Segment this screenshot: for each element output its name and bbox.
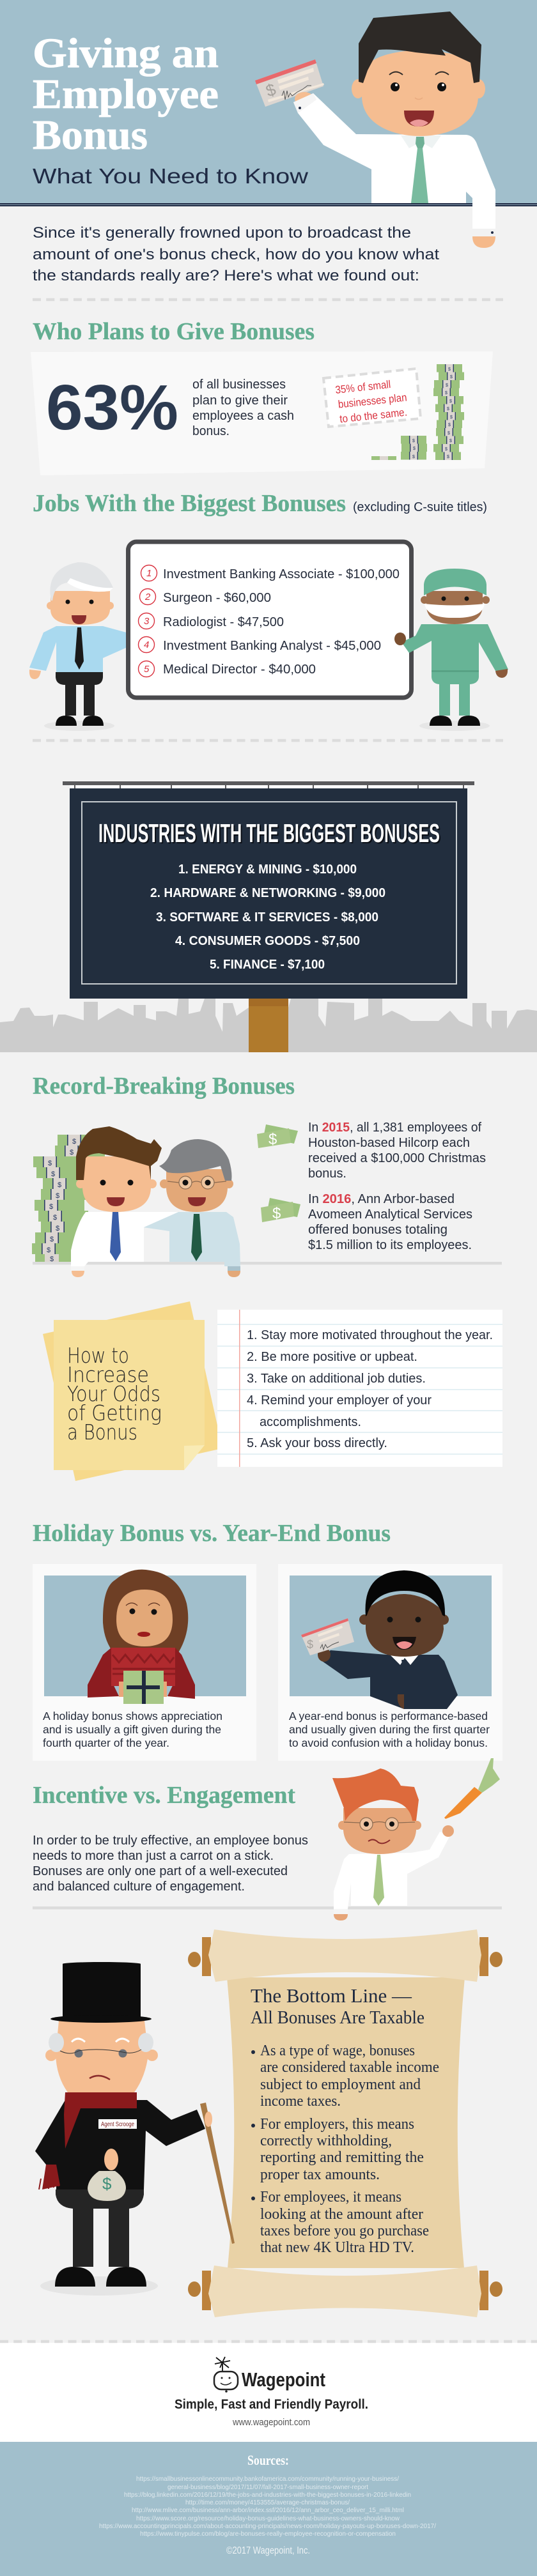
money stacks chart: $ [446, 383, 448, 388]
source links: https://www.score.org/resource/holiday-bonus-guidelines-what-business-owners-should-know [136, 2515, 400, 2522]
text: incentive paragraph: In order to be truly effective, an employee bonus [33, 1834, 308, 1848]
icon: cash bills 2016 [261, 1198, 300, 1222]
panel: lined paper tips [217, 1310, 502, 1467]
text: 2015 record continued [308, 1136, 486, 1181]
bottom roll [188, 2266, 502, 2317]
money stack behind men: $ [48, 1160, 52, 1167]
source links: https://www.accountingprincipals.com/about-accounting-principals/news-room/holiday-payouts-up-bonuses-down-2017/ [99, 2522, 436, 2530]
callout: small businesses: businesses plan [338, 391, 407, 411]
job list: Surgeon - $60,000 [163, 591, 271, 605]
legs and shoes [55, 2189, 146, 2287]
money stacks chart: $ [445, 391, 447, 395]
coat [35, 2100, 205, 2189]
title: Employee [33, 71, 219, 118]
tips list: 4. Remind your employer of your [247, 1393, 432, 1407]
tips list: 3. Take on additional job duties. [247, 1372, 426, 1386]
older man [143, 1139, 240, 1277]
panel: year-end bonus card [278, 1564, 502, 1761]
bonus check: $ [263, 79, 279, 100]
intro paragraph: the standards really are? Here's what we found out: [33, 267, 419, 284]
icon: cash bills 2015: $ [268, 1131, 277, 1148]
red circled numbers: 2 [144, 592, 151, 602]
industry list: 3. SOFTWARE & IT SERVICES - $8,000 [156, 910, 378, 924]
sources heading: Sources: [247, 2452, 289, 2468]
job list: Investment Banking Analyst - $45,000 [163, 639, 381, 653]
money stack behind men: $ [70, 1149, 74, 1156]
tips list: 2. Be more positive or upbeat. [247, 1350, 417, 1364]
bullet: wages: income taxes. [260, 2093, 341, 2110]
icon: carrot [444, 1758, 500, 1819]
red circled numbers: 5 [144, 664, 150, 675]
red circled numbers: 3 [144, 616, 150, 627]
heading: jobs: (excluding C-suite titles) [353, 500, 487, 514]
footer branding [0, 2342, 537, 2442]
illustration: man holding check [255, 12, 495, 248]
icon: cash bills 2016: $ [272, 1205, 281, 1222]
bullet: employers [251, 2116, 424, 2183]
red circled numbers: 4 [144, 640, 149, 650]
top hat [51, 1962, 152, 2023]
money stack behind men: $ [53, 1214, 57, 1222]
panel: holiday bonus card [33, 1564, 256, 1761]
money stacks chart: $ [450, 415, 453, 420]
tips list: 1. Stay more motivated throughout the year. [247, 1328, 493, 1342]
source links: general-business/blog/2017/11/07/fall-2017-small-business-owner-report [167, 2483, 368, 2491]
money stacks chart: $ [450, 375, 453, 379]
panel: who plans to give bonuses [31, 351, 493, 475]
stat description: bonus. [192, 424, 230, 438]
source links: https://smallbusinessonlinecommunity.bankofamerica.com/community/running-your-business/ [136, 2475, 399, 2483]
money stacks chart: $ [447, 407, 449, 411]
money stacks chart: $ [447, 431, 450, 436]
industry list: 2. HARDWARE & NETWORKING - $9,000 [150, 886, 385, 900]
callout: small businesses: to do the same. [339, 406, 408, 425]
source links: http://time.com/money/4153555/average-christmas-bonus/ [185, 2499, 350, 2506]
money stacks chart: $ [412, 439, 415, 443]
source links [99, 2475, 436, 2538]
holiday bonus text [43, 1710, 222, 1749]
scroll title [251, 1984, 424, 2028]
money stack behind men: $ [50, 1236, 54, 1243]
stat: 63 percent: 63% [46, 372, 178, 443]
illustration: man with check: $ [307, 1638, 313, 1651]
callout: small businesses: 35% of small [335, 378, 391, 396]
bullet: wages [251, 2043, 439, 2110]
website: www.wagepoint.com [232, 2418, 310, 2428]
money stack behind men: $ [56, 1225, 59, 1232]
job list [163, 567, 400, 677]
industry list: 5. FINANCE - $7,100 [210, 958, 325, 972]
copyright: ©2017 Wagepoint, Inc. [226, 2545, 310, 2556]
text: 2016 record continued: $1.5 million to its employees. [308, 1238, 472, 1252]
heading: jobs [33, 490, 487, 517]
text: 2016 record continued [308, 1208, 472, 1252]
tagline: Simple, Fast and Friendly Payroll. [175, 2397, 368, 2412]
money stacks chart: $ [412, 455, 415, 459]
money stacks chart [371, 364, 464, 460]
money stacks chart: $ [449, 399, 452, 404]
illustration: man in blue shirt [29, 562, 139, 731]
job list: Radiologist - $47,500 [163, 615, 284, 629]
bullet: employees [251, 2189, 429, 2256]
logo wordmark: Wagepoint [242, 2368, 325, 2391]
holiday bonus text: A holiday bonus shows appreciation [43, 1710, 222, 1722]
intro paragraph: amount of one's bonus check, how do you know what [33, 246, 439, 263]
cane [200, 2103, 235, 2244]
year-end bonus text: to avoid confusion with a holiday bonus. [289, 1736, 488, 1749]
money stack behind men: $ [51, 1170, 55, 1178]
year-end bonus text [289, 1710, 490, 1749]
sticky note text: Your Odds [67, 1381, 160, 1406]
subtitle: What You Need to Know [33, 164, 308, 188]
tips list: accomplishments. [260, 1415, 361, 1429]
younger man [71, 1126, 178, 1277]
bullet: employees: For employees, it means [260, 2189, 401, 2205]
logo icon [214, 2357, 238, 2393]
illustration: man with check [301, 1570, 458, 1709]
stat description: of all businesses [192, 378, 286, 392]
money bag: $ [102, 2174, 112, 2193]
bullet: employers: reporting and remitting the [260, 2149, 424, 2166]
job list: Investment Banking Associate - $100,000 [163, 567, 400, 581]
text: 2015 record continued: received a $100,000 Christmas [308, 1151, 486, 1165]
bullet: employers: For employers, this means [260, 2116, 414, 2133]
intro paragraph: Since it's generally frowned upon to broadcast the [33, 224, 411, 241]
name badge [98, 2119, 137, 2129]
panel: industries billboard [63, 781, 474, 999]
illustration: doctor in scrubs [394, 569, 508, 731]
bullet: employees: looking at the amount after [260, 2206, 423, 2223]
year-end bonus text: A year-end bonus is performance-based [289, 1710, 488, 1722]
industry list: 1. ENERGY & MINING - $10,000 [178, 862, 357, 877]
stat description: employees a cash [192, 409, 294, 423]
stat description [192, 378, 294, 438]
callout: small businesses [323, 369, 421, 427]
tips list: 5. Ask your boss directly. [247, 1436, 387, 1450]
bullet: wages: As a type of wage, bonuses [260, 2043, 415, 2059]
name badge: Agent Scrooge [101, 2121, 134, 2128]
text: 2015 record continued: Houston-based Hilcorp each [308, 1136, 470, 1150]
bullet: employers: proper tax amounts. [260, 2166, 380, 2183]
scroll title: The Bottom Line — [251, 1984, 412, 2007]
holiday bonus text: and is usually a gift given during the [43, 1723, 221, 1736]
text: 2015 record: In 2015, all 1,381 employees of [308, 1121, 481, 1135]
sticky note text: a Bonus [67, 1420, 137, 1445]
skyline background [0, 999, 537, 1052]
tips list [247, 1328, 493, 1450]
money stacks chart: $ [413, 447, 416, 451]
money stack behind men: $ [58, 1181, 61, 1189]
sources footer [0, 2442, 537, 2576]
sticky note text [67, 1343, 162, 1445]
illustration: two happy men [71, 1126, 240, 1277]
title: Giving an [33, 30, 219, 77]
bonus check [255, 59, 324, 107]
sticky note text: Increase [67, 1362, 149, 1387]
money stack behind men: $ [72, 1138, 76, 1146]
text: incentive paragraph [33, 1834, 308, 1894]
billboard post [249, 999, 288, 1052]
money stack behind men: $ [50, 1255, 54, 1263]
text: 2015 record continued: bonus. [308, 1167, 346, 1181]
holiday bonus text: fourth quarter of the year. [43, 1736, 169, 1749]
sticky note text: of Getting [67, 1400, 162, 1425]
illustration: agent scrooge [35, 1962, 235, 2296]
money stack behind men [32, 1135, 107, 1263]
stat description: plan to give their [192, 394, 288, 408]
red circled numbers: 1 [146, 568, 152, 579]
intro paragraph [33, 224, 439, 284]
title: Bonus [33, 112, 148, 158]
heading: jobs: Jobs With the Biggest Bonuses [33, 490, 346, 517]
text: 2016 record continued: Avomeen Analytical Services [308, 1208, 472, 1222]
money stack behind men: $ [49, 1203, 53, 1211]
bullet: employees: taxes before you go purchase [260, 2223, 429, 2239]
red circled numbers [138, 565, 157, 677]
job list: Medical Director - $40,000 [163, 663, 316, 677]
scroll paper [227, 1977, 465, 2268]
panel: bottom line scroll [188, 1929, 502, 2317]
bullet: wages: are considered taxable income [260, 2059, 439, 2076]
money stacks chart: $ [448, 367, 451, 372]
bullet: wages: subject to employment and [260, 2076, 421, 2093]
text: 2016 record: In 2016, Ann Arbor-based [308, 1192, 455, 1206]
bullet: employers: correctly withholding, [260, 2133, 392, 2149]
icon: cash bills 2015 [257, 1124, 298, 1148]
sticky note text: How to [67, 1343, 129, 1368]
money stack behind men: $ [47, 1246, 51, 1254]
year-end bonus text: and usually given during the first quarter [289, 1723, 490, 1736]
text: incentive paragraph: needs to more than just a carrot on a stick. [33, 1849, 274, 1863]
source links: https://www.tinypulse.com/blog/are-bonuses-really-employee-recognition-or-compensation [140, 2530, 396, 2538]
illustration: man with carrot [332, 1758, 500, 1920]
illustration: woman with gift [88, 1570, 195, 1704]
industry list: 4. CONSUMER GOODS - $7,500 [175, 934, 360, 948]
red scarf [39, 2092, 137, 2189]
head [352, 12, 485, 136]
bullet: employees: that new 4K Ultra HD TV. [260, 2239, 414, 2256]
money bag [88, 2149, 126, 2201]
scroll title: All Bonuses Are Taxable [251, 2008, 424, 2028]
money stack behind men: $ [56, 1192, 59, 1200]
text: 2016 record continued: offered bonuses totaling [308, 1223, 447, 1237]
sticky note: how to increase odds [43, 1301, 222, 1481]
industry list [150, 862, 385, 972]
money stacks chart: $ [448, 423, 451, 427]
money stacks chart: $ [445, 447, 447, 452]
green tie [411, 137, 428, 203]
panel: jobs list board [128, 542, 412, 698]
money stacks chart: $ [449, 439, 452, 443]
source links: https://blog.linkedin.com/2016/12/19/the-jobs-and-industries-with-the-biggest-bonuses-in-2016-linkedin [124, 2491, 411, 2499]
text: incentive paragraph: Bonuses are only one part of a well-executed [33, 1864, 288, 1878]
title [33, 30, 219, 158]
top roll [188, 1929, 502, 1982]
heading: who plans: Who Plans to Give Bonuses [33, 318, 315, 345]
heading: holiday vs year-end: Holiday Bonus vs. Year-End Bonus [33, 1520, 391, 1547]
text: incentive paragraph: and balanced culture of engagement. [33, 1880, 245, 1894]
source links: http://www.mlive.com/business/ann-arbor/index.ssf/2016/12/ann_arbor_ceo_deliver_15_milli.html [132, 2506, 404, 2514]
money stacks chart: $ [447, 455, 449, 459]
header banner [0, 0, 537, 248]
heading: record-breaking: Record-Breaking Bonuses [33, 1073, 295, 1100]
heading: incentive vs engagement: Incentive vs. Engagement [33, 1782, 295, 1809]
head [45, 2021, 158, 2092]
